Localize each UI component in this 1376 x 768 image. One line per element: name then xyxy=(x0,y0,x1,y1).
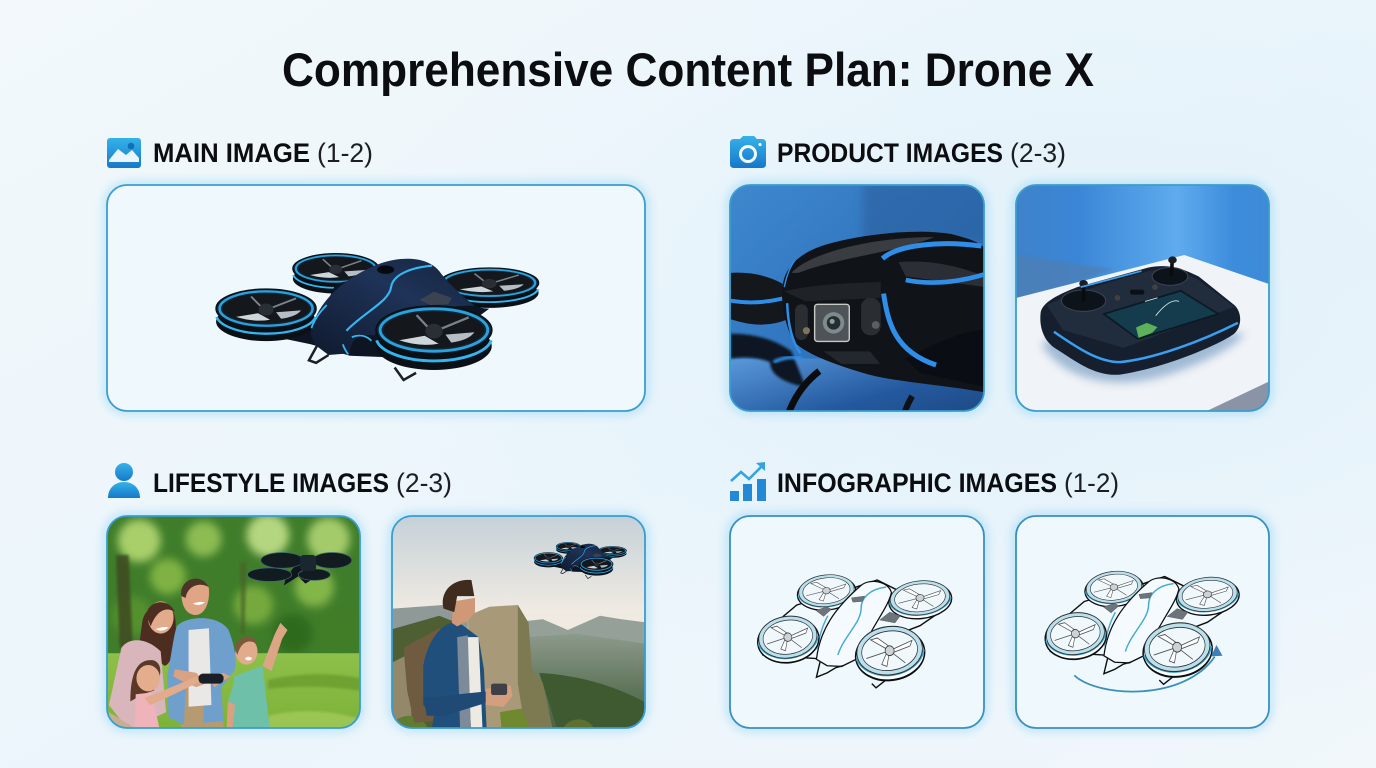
panel: drone camera close-up xyxy=(722,176,992,420)
heading: infographic images: (1-2) xyxy=(1064,468,1119,498)
person: girl xyxy=(130,660,200,728)
person: boy xyxy=(226,623,288,728)
line drone rotated xyxy=(1042,568,1241,684)
person: father xyxy=(167,578,236,728)
arrow: rotation xyxy=(1074,645,1222,692)
heading: product images: PRODUCT IMAGES xyxy=(777,138,1003,168)
drone in the air xyxy=(247,552,352,585)
panel: line drawing with rotation arrow xyxy=(1016,516,1269,728)
icon: person xyxy=(108,463,140,498)
line drone xyxy=(755,572,953,688)
icon: camera xyxy=(730,136,766,168)
icon: chart xyxy=(730,462,766,501)
drone photo xyxy=(216,254,539,380)
heading: main image: MAIN IMAGE xyxy=(153,138,310,168)
heading: infographic images: INFOGRAPHIC IMAGES xyxy=(777,468,1057,498)
heading: lifestyle images: (2-3) xyxy=(396,468,452,498)
section: product images xyxy=(720,136,1291,441)
icon: picture xyxy=(107,138,141,168)
section: infographic images xyxy=(730,462,1269,728)
sky and mountains xyxy=(392,517,644,728)
heading: lifestyle images: LIFESTYLE IMAGES xyxy=(153,468,389,498)
person: mother xyxy=(108,601,176,728)
foliage backdrop xyxy=(108,516,360,728)
panel: main drone image xyxy=(107,185,645,411)
small drone xyxy=(534,542,627,579)
section: main image xyxy=(107,138,645,411)
man with backpack xyxy=(404,580,512,728)
heading: main image: (1-2) xyxy=(317,138,373,168)
title: Comprehensive Content Plan: Drone X xyxy=(282,43,1094,96)
section: lifestyle images xyxy=(100,463,657,755)
panel: family flying drone xyxy=(100,514,371,753)
panel: line drawing xyxy=(730,516,984,728)
panel: remote controller xyxy=(1008,177,1277,420)
heading: product images: (2-3) xyxy=(1010,138,1066,168)
panel: hiker on mountain xyxy=(386,516,657,755)
